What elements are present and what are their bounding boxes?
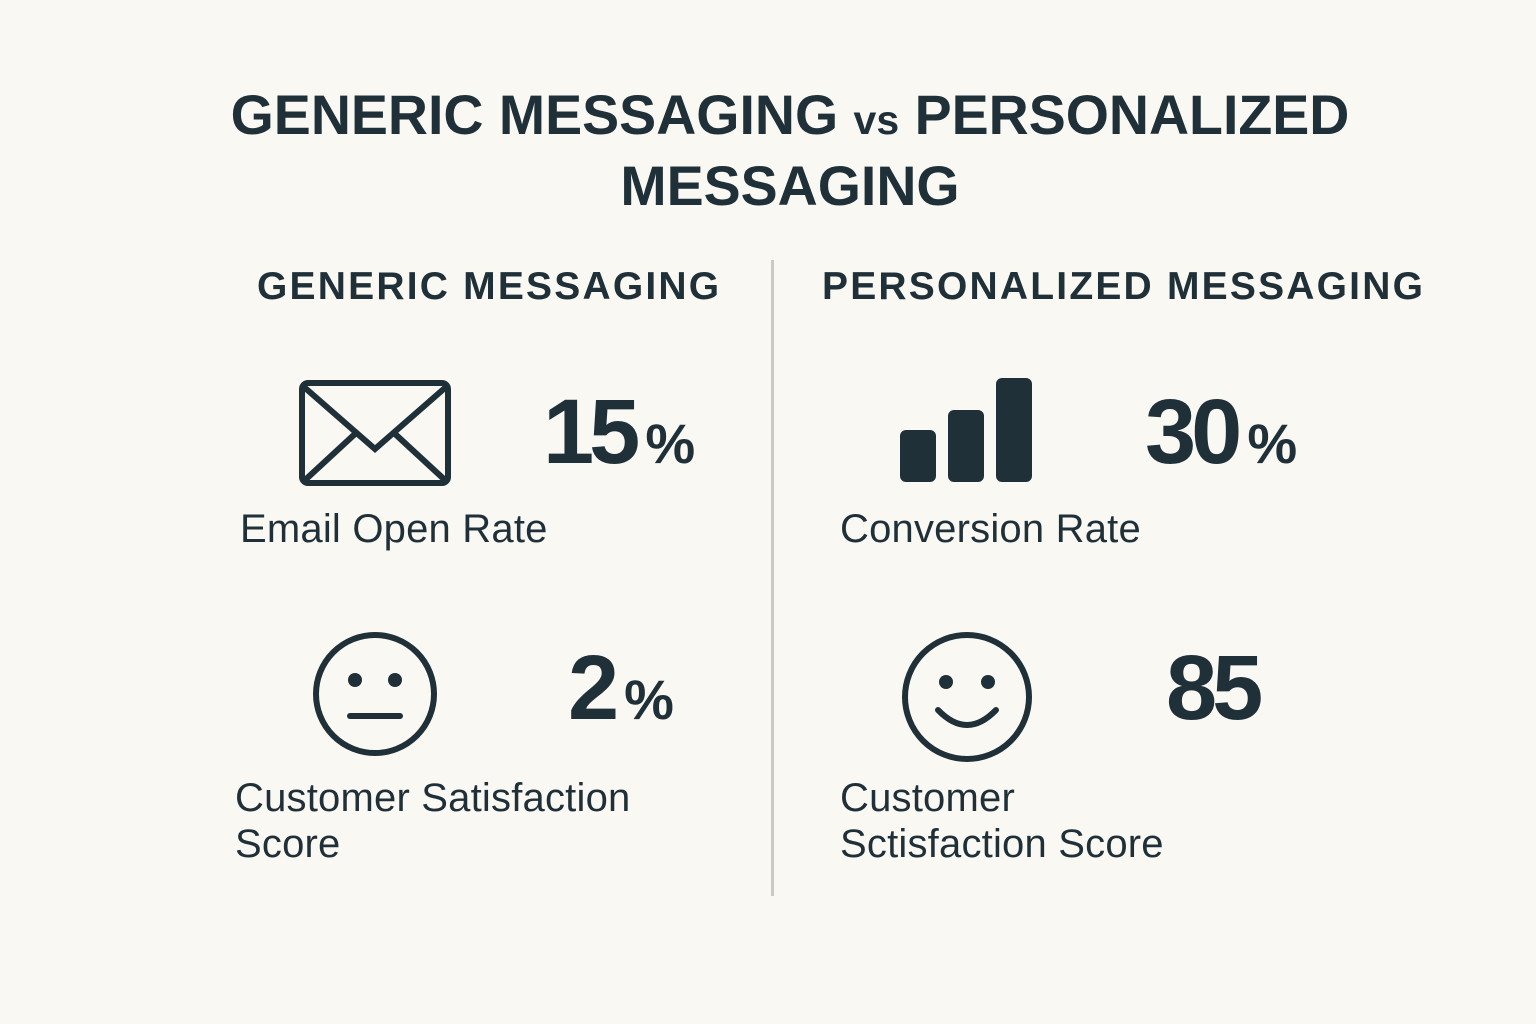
label: customer satisfaction score: Customer Satisfaction bbox=[235, 776, 630, 820]
stat: 2%: 2% bbox=[568, 637, 674, 739]
icon: envelope bbox=[299, 380, 451, 486]
divider bbox=[771, 260, 774, 896]
title: GENERIC MESSAGING vs PERSONALIZED bbox=[231, 84, 1349, 146]
icon: neutral face bbox=[313, 632, 437, 756]
heading: personalized messaging: PERSONALIZED MESSAGING bbox=[822, 265, 1425, 308]
label: customer satisfaction score: Score bbox=[235, 822, 340, 866]
label: conversion rate: Conversion Rate bbox=[840, 507, 1141, 551]
stat: 85: 85 bbox=[1166, 637, 1258, 739]
stat: 15%: 15% bbox=[543, 381, 695, 483]
heading: generic messaging: GENERIC MESSAGING bbox=[257, 265, 721, 308]
label: email open rate: Email Open Rate bbox=[240, 507, 548, 551]
label: customer satisfaction score bbox=[235, 776, 630, 866]
stat: 30%: 30% bbox=[1145, 381, 1297, 483]
label: customer satisfaction score (personalized) bbox=[840, 776, 1164, 866]
title: MESSAGING bbox=[620, 155, 960, 217]
label: customer satisfaction score (personalized): Sctisfaction Score bbox=[840, 822, 1164, 866]
label: customer satisfaction score (personalized): Customer bbox=[840, 776, 1015, 820]
icon: smiley face bbox=[902, 632, 1032, 762]
icon: bar chart bbox=[900, 378, 1032, 482]
title bbox=[231, 84, 1349, 217]
